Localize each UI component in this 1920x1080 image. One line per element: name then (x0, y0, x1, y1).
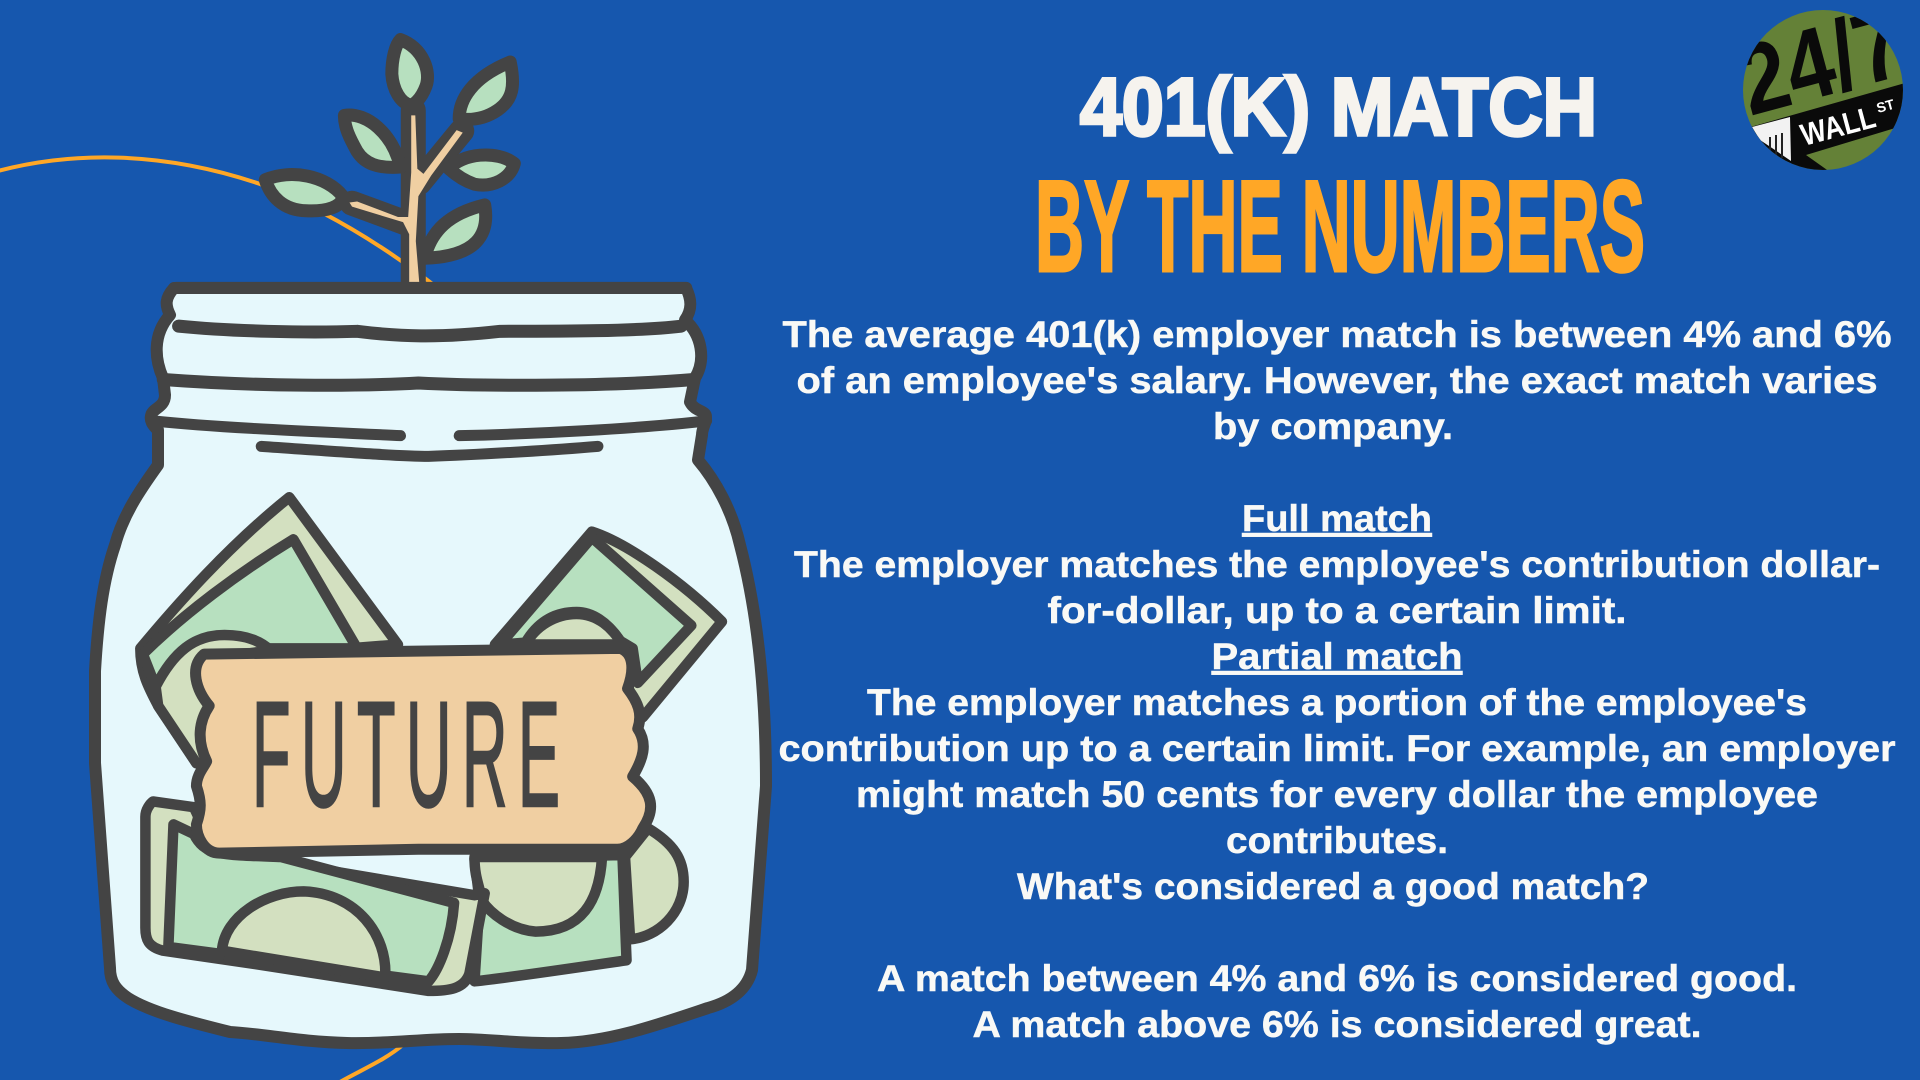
label: FUTURE tag: FUTURE (252, 672, 570, 839)
orange decorative arc (0, 157, 440, 1080)
jar body (95, 288, 766, 1043)
text block: explanation of 401(k) matching: What's considered a good match? (1017, 866, 1649, 907)
logo: 24/7 Wall St: ST (1875, 96, 1896, 116)
text block: explanation of 401(k) matching: The employer matches the employee's contribution dollar- (794, 544, 1880, 585)
text block: explanation of 401(k) matching: The average 401(k) employer match is between 4% and 6% (782, 314, 1892, 355)
logo: 24/7 Wall St (1743, 10, 1903, 170)
text block: explanation of 401(k) matching: for-dollar, up to a certain limit. (1048, 590, 1626, 631)
text block: explanation of 401(k) matching: Full match (1242, 498, 1432, 539)
text block: explanation of 401(k) matching: The employer matches a portion of the employee's (867, 682, 1807, 723)
text block: explanation of 401(k) matching: of an employee's salary. However, the exact match varies (796, 360, 1878, 401)
text block: explanation of 401(k) matching: might match 50 cents for every dollar the employee (856, 774, 1818, 815)
label: FUTURE tag (196, 648, 651, 853)
text block: explanation of 401(k) matching: A match above 6% is considered great. (972, 1004, 1702, 1045)
text block: explanation of 401(k) matching: by company. (1213, 406, 1453, 447)
text block: explanation of 401(k) matching: contribution up to a certain limit. For example, an employer (778, 728, 1896, 769)
logo: 24/7 Wall St: WALL (1797, 99, 1879, 153)
text block: explanation of 401(k) matching: A match between 4% and 6% is considered good. (877, 958, 1797, 999)
money bills in jar (140, 497, 722, 991)
jar lid and neck lines (153, 288, 707, 456)
icon: plant sprout (265, 40, 514, 286)
text block: explanation of 401(k) matching: contributes. (1226, 820, 1448, 861)
heading: 401(k) match: 401(K) MATCH (1080, 62, 1597, 153)
text block: explanation of 401(k) matching: Partial match (1212, 636, 1462, 677)
illustration: glass jar (95, 288, 766, 1043)
text block: explanation of 401(k) matching (778, 314, 1896, 1045)
